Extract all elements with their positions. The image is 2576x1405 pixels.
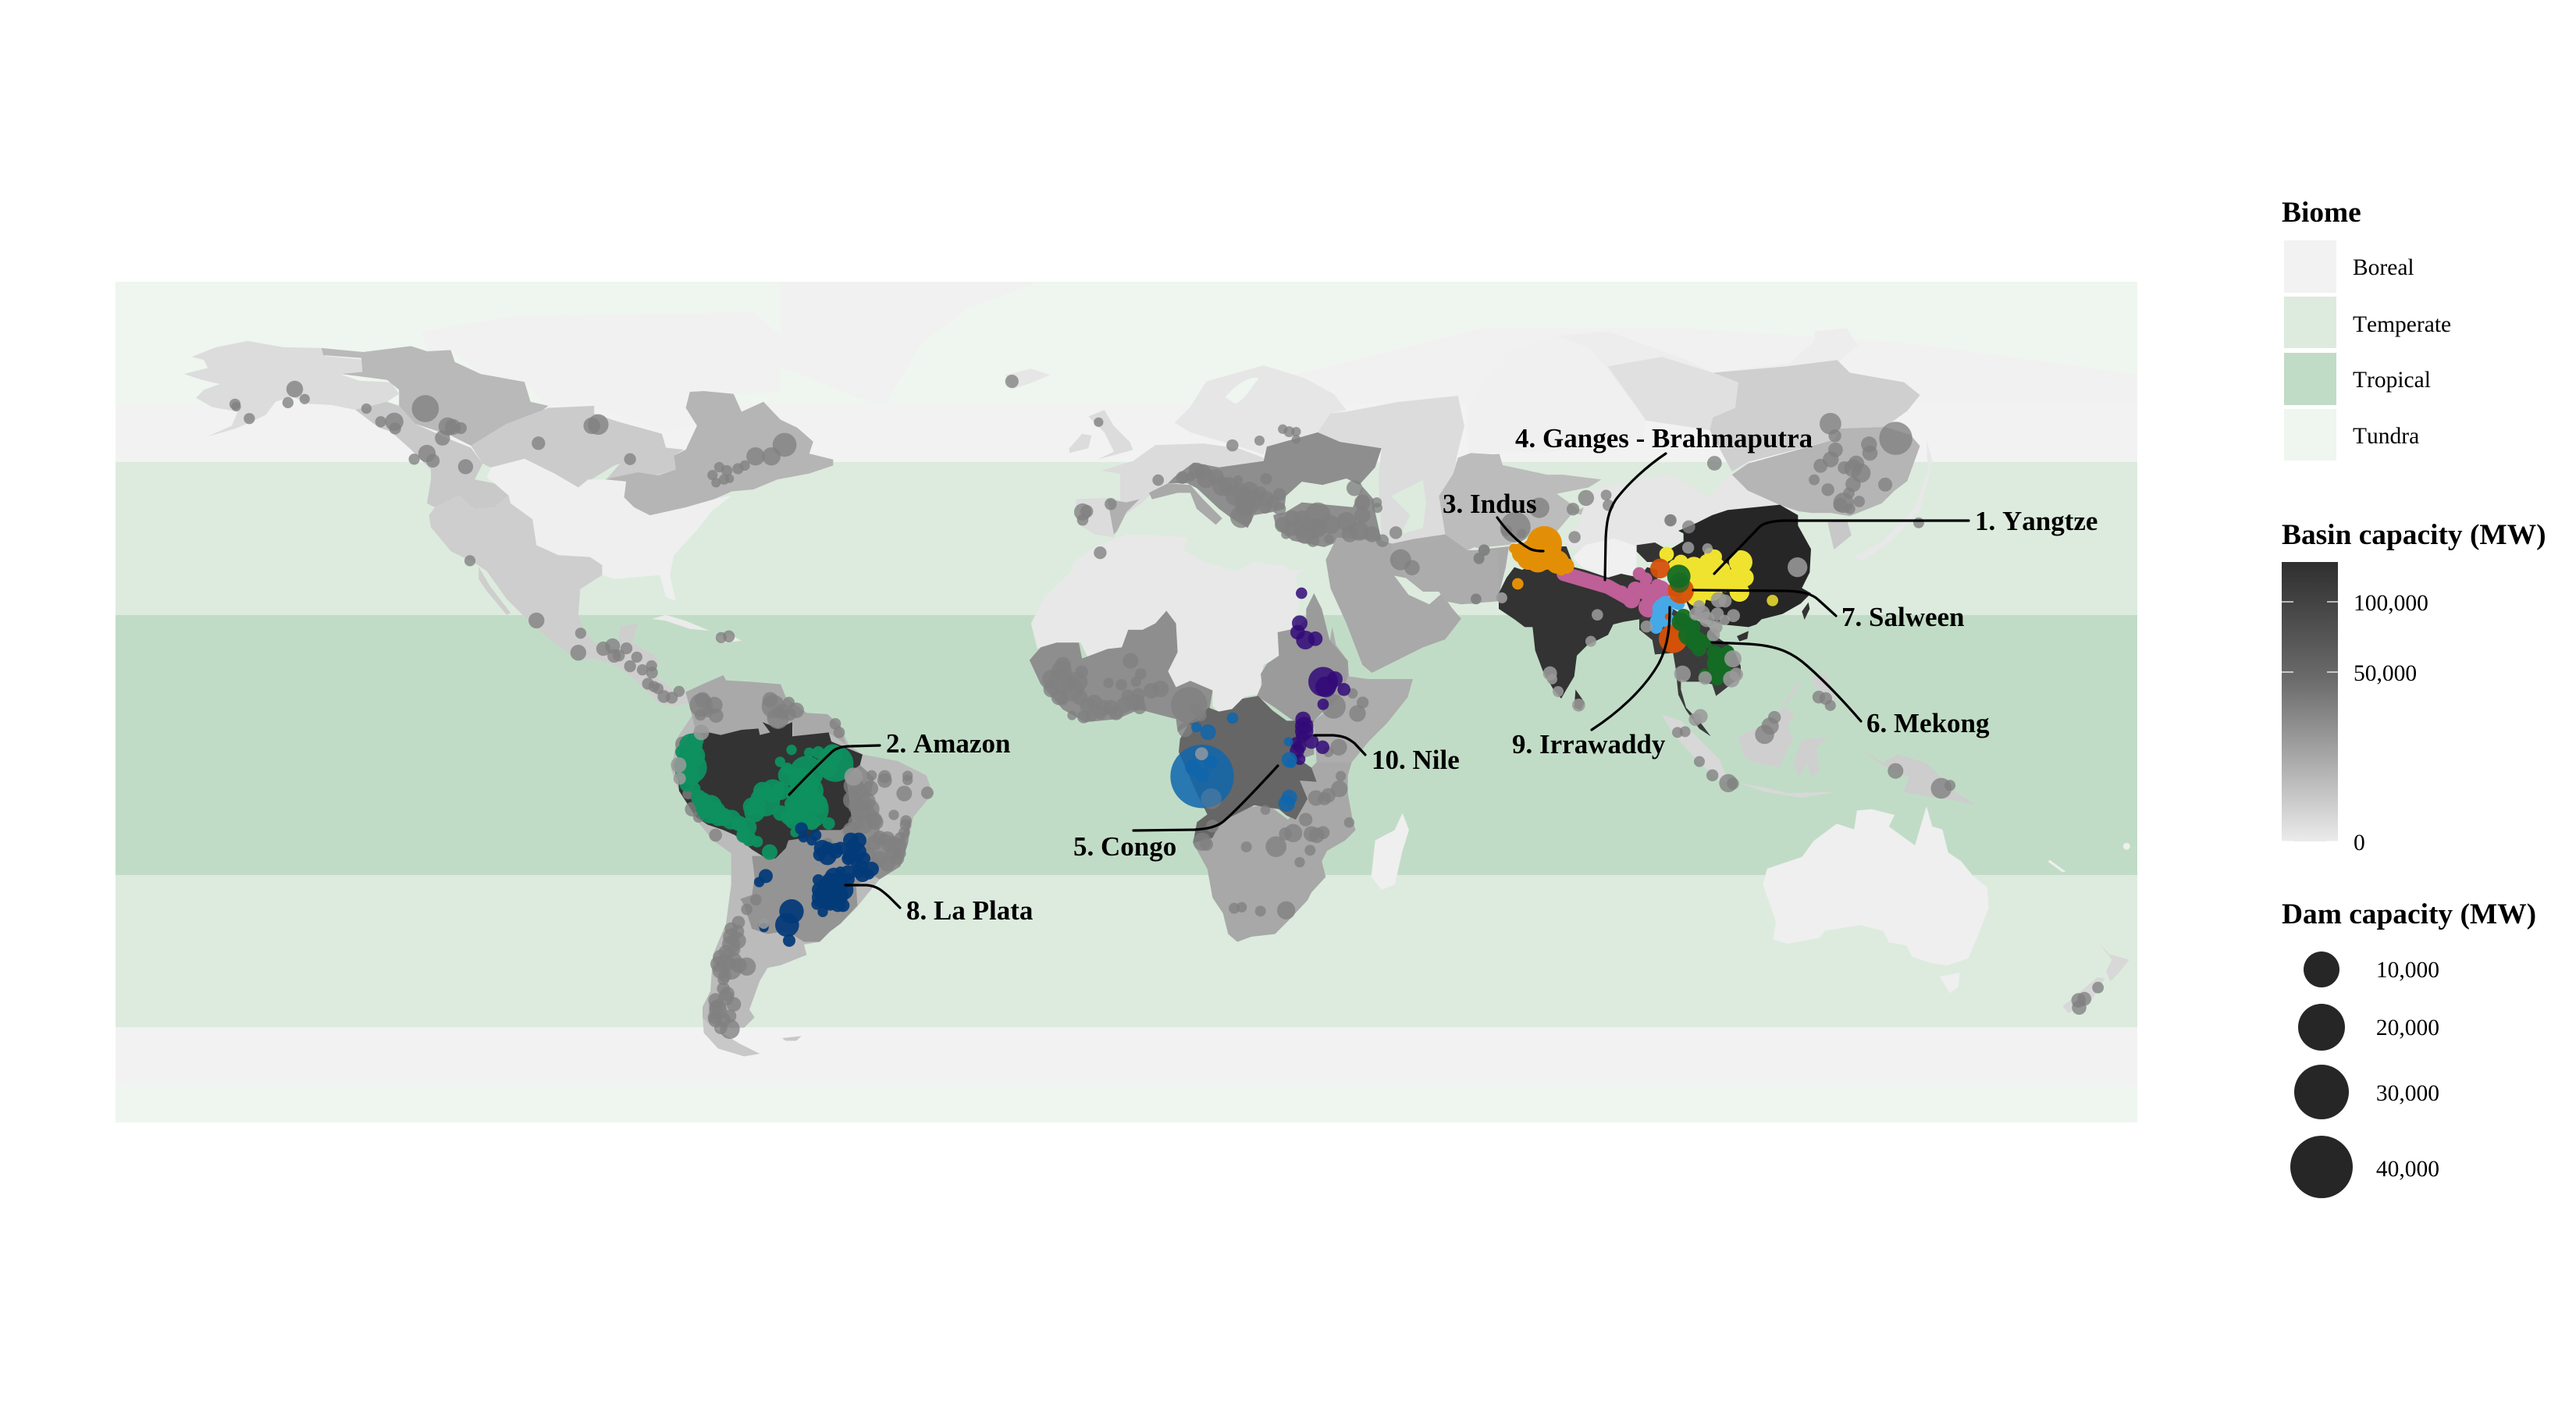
dams: east asia [1471,413,1924,604]
land: south asia and southeast asia [1499,505,1811,783]
legend: biome [2282,197,2451,461]
dams: irrawaddy basin [1649,596,1685,634]
legend: basin capacity [2282,519,2546,855]
land: oceania and maritime asia [1738,673,2130,1013]
dams: salween basin [1650,559,1694,653]
dams: indonesia and northern china border, grey dots [1664,514,1739,792]
legend: basin capacity: 100,000 [2354,591,2428,616]
basin labels: 3. Indus [1443,489,1537,519]
legend: basin capacity: Basin capacity (MW) [2282,519,2546,551]
legend: biome: Boreal [2353,255,2414,280]
dams: grey dots over dark asian basins [1496,542,1807,726]
legend: biome: Tundra [2353,424,2419,449]
dams: congo basin [1170,713,1297,812]
land: sub-saharan africa basins [1179,593,1413,942]
legend: biome: Biome [2282,197,2361,229]
dams: north america [229,381,796,704]
dams: europe, middle east and west asia [1005,375,1490,604]
land: europe, north africa and middle east basins [1005,365,1499,732]
dams: amazon basin [674,732,853,860]
basin labels: 8. La Plata [906,895,1033,926]
dams: oceania and maritime asia [1755,691,2104,1015]
legend: biome: Temperate [2353,312,2451,337]
legend: dam capacity: 40,000 [2376,1157,2439,1182]
dams: south america other basins [675,692,934,1039]
basin labels: 7. Salween [1841,602,1964,632]
legend: biome: Tropical [2353,368,2431,393]
dams: africa other basins [1042,653,1368,919]
dams: nile basin [1290,588,1350,765]
dams: indus basin [1509,526,1574,589]
dams: yangtze basin [1660,547,1778,607]
basin labels: 2. Amazon [886,728,1010,759]
basin labels: 10. Nile [1372,745,1460,775]
dams: ganges-brahmaputra basin [1564,567,1670,617]
land: eurasia northern and eastern basins [1468,328,1933,603]
basin labels: 1. Yangtze [1975,506,2097,536]
legend: dam capacity: 10,000 [2376,958,2439,983]
land: north america basins [184,341,833,706]
dams: la plata basin [754,822,879,947]
dams: mekong basin [1667,564,1735,685]
land: arctic tundra [422,282,2137,432]
basin labels: 9. Irrawaddy [1512,729,1666,759]
legend: dam capacity: 30,000 [2376,1081,2439,1106]
legend: basin capacity: 50,000 [2354,661,2417,686]
basin labels [886,423,2097,926]
legend: dam capacity [2282,898,2536,1198]
connector lines from labels to basins [789,454,1969,908]
basin labels: 4. Ganges - Brahmaputra [1515,423,1813,454]
dams: south america, grey dots over basins [671,724,863,929]
land: south america basins [671,675,933,1056]
legend: dam capacity: Dam capacity (MW) [2282,898,2536,930]
dams: grey dots over the congo bubble [1195,747,1222,809]
basin labels: 6. Mekong [1866,708,1990,738]
basin labels: 5. Congo [1073,831,1176,862]
legend: basin capacity: 0 [2354,831,2365,855]
biome background bands [116,282,2137,1122]
legend: dam capacity: 20,000 [2376,1016,2439,1040]
